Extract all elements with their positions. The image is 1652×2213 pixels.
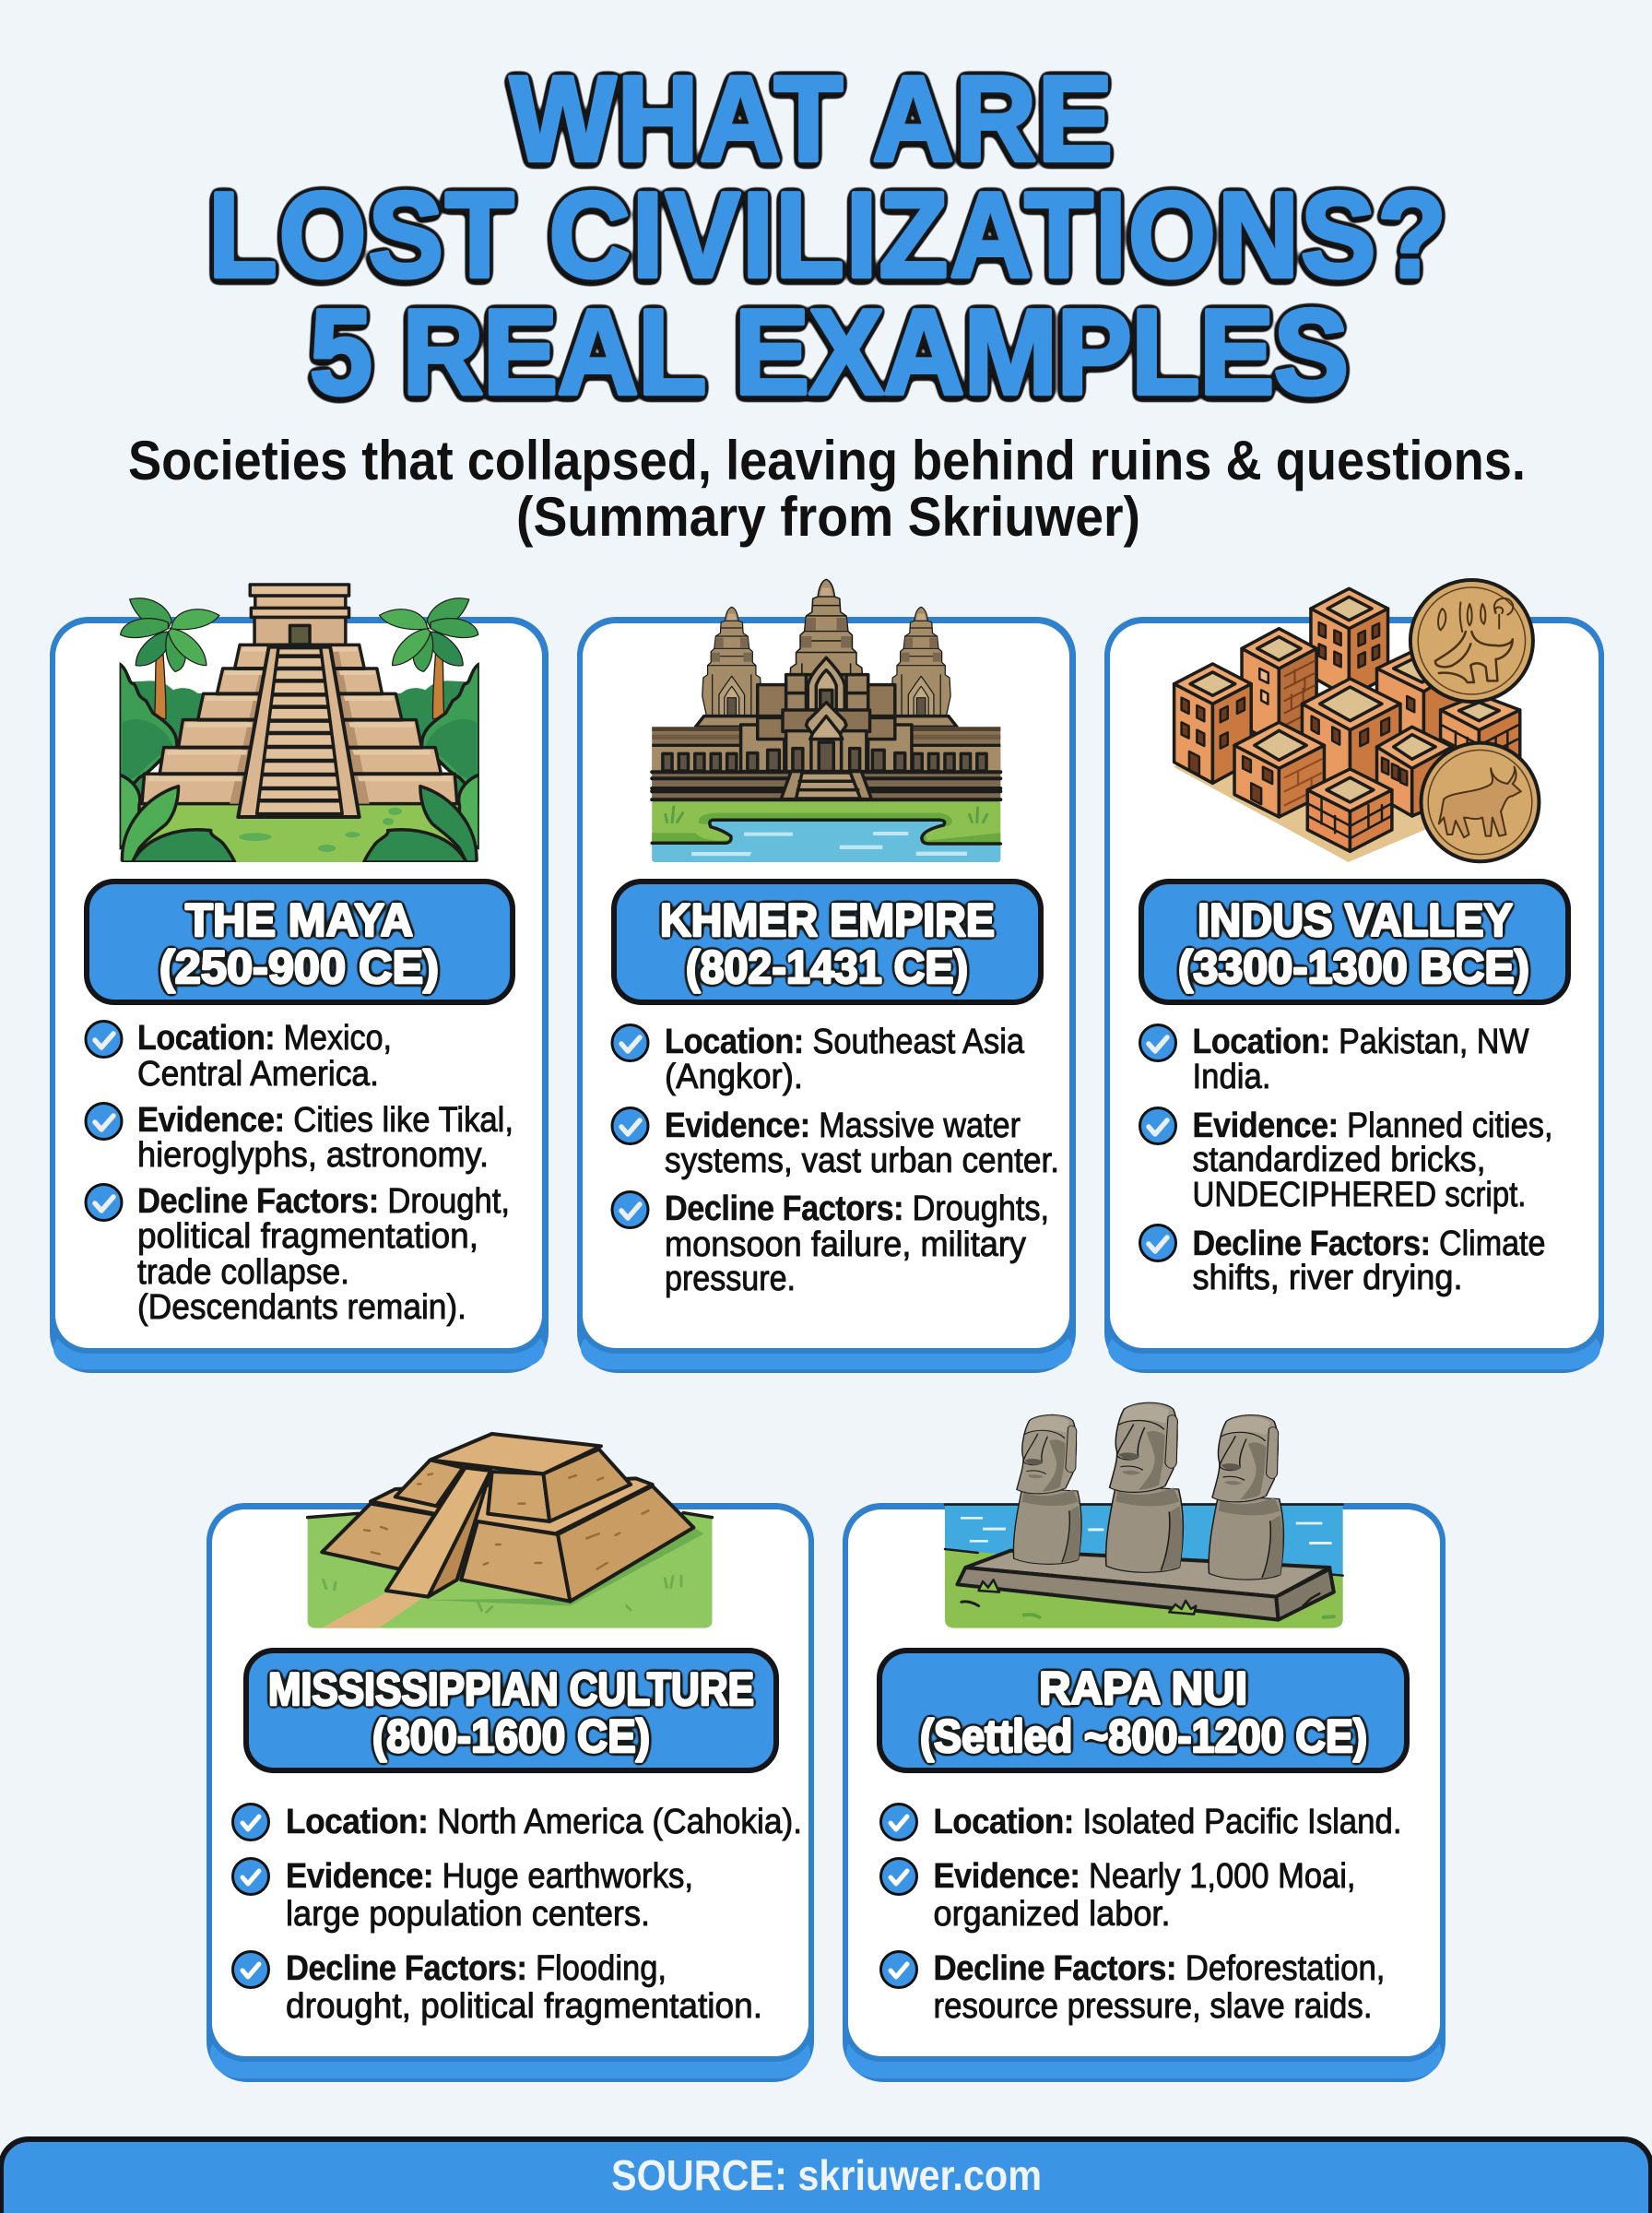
left building: [1174, 664, 1251, 783]
bullet: decline factors: [881, 1949, 1385, 2026]
illustration: earthwork mound: [308, 1434, 712, 1628]
seal with bull: [1422, 743, 1539, 861]
heading plate: Mississippian Culture: [246, 1651, 776, 1770]
heading plate: The Maya: [87, 882, 513, 1002]
heading plate: Indus Valley: [1141, 882, 1568, 1002]
title: 5 REAL EXAMPLES: [310, 284, 1349, 420]
card frame: [843, 1503, 1446, 2082]
panel: The Maya: [50, 585, 549, 1373]
illustration: Angkor temple with moat: [652, 579, 1000, 862]
panel: Rapa Nui: [843, 1402, 1446, 2082]
bullet: decline factors: [232, 1949, 762, 2026]
palm trees: [121, 598, 219, 719]
bullet: decline factors: [86, 1182, 510, 1327]
bullet: evidence: Evidence: Planned cities,: [1193, 1106, 1552, 1145]
footer source bar: SOURCE: skriuwer.com: [611, 2151, 1042, 2199]
far right brick building: [1441, 694, 1520, 777]
bullet: location: Location: Mexico,: [137, 1019, 392, 1058]
bullet: evidence: organized labor.: [933, 1895, 1171, 1934]
heading plate: Mississippian Culture: MISSISSIPPIAN CULTURE: [268, 1663, 754, 1715]
bullet: evidence: [612, 1106, 1059, 1180]
heading plate: The Maya: (250-900 CE): [159, 941, 439, 993]
upper tier: [395, 1434, 631, 1521]
bullet: decline factors: Decline Factors: Drought,: [137, 1182, 510, 1221]
second tall building: [1242, 629, 1316, 747]
bullet: decline factors: [1139, 1225, 1545, 1297]
front left building: [1234, 722, 1324, 817]
card frame: [50, 617, 549, 1373]
bullet: decline factors: Decline Factors: Flooding,: [286, 1949, 667, 1988]
central gate: [741, 657, 912, 772]
sea and island: [945, 1505, 1343, 1628]
bullet: location: Location: North America (Cahokia).: [286, 1803, 802, 1841]
ramp: [386, 1468, 490, 1597]
front brick cube: [1307, 769, 1392, 851]
bullet: decline factors: political fragmentation,: [137, 1217, 478, 1256]
heading plate: Rapa Nui: RAPA NUI: [1039, 1663, 1247, 1714]
bullet: evidence: Evidence: Cities like Tikal,: [137, 1101, 513, 1140]
subtitle: Societies that collapsed, leaving behind ruins & questions.: [128, 430, 1526, 491]
sand base: [1174, 735, 1433, 862]
bullet: evidence: [881, 1857, 1355, 1934]
panel: Mississippian Culture: [206, 1434, 814, 2082]
bullet: evidence: hieroglyphs, astronomy.: [137, 1136, 489, 1175]
bullet: evidence: Evidence: Massive water: [665, 1106, 1021, 1145]
heading plate: Khmer Empire: [614, 882, 1041, 1002]
bullet: evidence: Evidence: Huge earthworks,: [286, 1857, 693, 1896]
stone platform: [957, 1551, 1334, 1620]
bullet: decline factors: [612, 1189, 1049, 1298]
side towers: [702, 607, 761, 716]
card frame: [577, 617, 1076, 1373]
bullet: decline factors: drought, political fragmentation.: [286, 1987, 762, 2026]
card frame: [1104, 617, 1604, 1373]
bullet: decline factors: (Descendants remain).: [137, 1288, 466, 1327]
temple galleries: [652, 685, 1000, 800]
card frame: [206, 1503, 814, 2082]
bullet: evidence: standardized bricks,: [1193, 1141, 1486, 1179]
bullet: evidence: systems, vast urban center.: [665, 1142, 1059, 1180]
bullet: evidence: [232, 1857, 693, 1934]
heading plate: Mississippian Culture: (800-1600 CE): [372, 1710, 650, 1762]
right rear building: [1377, 650, 1459, 759]
back tall building: [1311, 588, 1388, 698]
title: WHAT ARE: [510, 51, 1113, 186]
central staircase: [238, 647, 360, 817]
bullet: evidence: [1139, 1106, 1552, 1214]
bullet: location: Location: Southeast Asia: [665, 1023, 1025, 1061]
heading plate: Rapa Nui: (Settled ~800-1200 CE): [920, 1710, 1367, 1762]
bullet: decline factors: shifts, river drying.: [1193, 1259, 1462, 1297]
grass and moat: [652, 800, 1000, 862]
right front building: [1377, 727, 1452, 816]
bullet: decline factors: Decline Factors: Climate: [1193, 1225, 1545, 1263]
heading plate: Khmer Empire: (802-1431 CE): [686, 941, 968, 993]
heading plate: Indus Valley: INDUS VALLEY: [1198, 894, 1513, 946]
moai right: [1209, 1415, 1283, 1580]
moai left: [1013, 1414, 1081, 1564]
bullet: decline factors: Decline Factors: Deforestation,: [933, 1949, 1385, 1988]
panel: Khmer Empire: [577, 579, 1076, 1373]
bullet: location: Central America.: [137, 1055, 379, 1094]
title: LOST CIVILIZATIONS?: [208, 167, 1446, 302]
temple: [250, 585, 349, 645]
soil marks: [364, 1473, 648, 1569]
footer source bar: [1, 2139, 1651, 2213]
subtitle: (Summary from Skriuwer): [516, 486, 1140, 548]
pyramid tiers: [142, 645, 457, 804]
bullet: location: [612, 1023, 1025, 1096]
bullet: location: Location: Isolated Pacific Island.: [933, 1803, 1401, 1841]
bullet: location: (Angkor).: [665, 1058, 803, 1096]
bullet: evidence: Evidence: Nearly 1,000 Moai,: [933, 1857, 1355, 1896]
foreground leaves: [120, 775, 479, 862]
bullet: evidence: UNDECIPHERED script.: [1193, 1176, 1527, 1214]
ground spots: [239, 808, 402, 852]
grass: [308, 1512, 712, 1628]
moai center: [1106, 1402, 1183, 1572]
bullet: location: India.: [1193, 1058, 1270, 1096]
central tower: [789, 579, 863, 716]
lower tier: [322, 1478, 693, 1602]
subtitle: [128, 430, 1526, 548]
heading plate: Rapa Nui: [879, 1651, 1407, 1770]
jungle bushes: [120, 664, 479, 799]
bullet: location: Location: Pakistan, NW: [1193, 1023, 1529, 1061]
center building: [1302, 679, 1400, 796]
heading plate: Khmer Empire: KHMER EMPIRE: [660, 894, 995, 946]
heading plate: Indus Valley: (3300-1300 BCE): [1178, 941, 1529, 993]
illustration: brick city and seals: [1174, 580, 1539, 862]
bullet: evidence: large population centers.: [286, 1895, 650, 1934]
bullet: decline factors: monsoon failure, military: [665, 1225, 1026, 1264]
heading plate: The Maya: THE MAYA: [185, 894, 413, 946]
seal with script and animal: [1410, 580, 1533, 702]
illustration: Moai statues: [945, 1402, 1343, 1628]
bullet: location: [86, 1019, 392, 1094]
front steps: [781, 772, 871, 799]
bullet: decline factors: Decline Factors: Droughts,: [665, 1189, 1049, 1228]
bullet: evidence: [86, 1101, 513, 1175]
bullet: decline factors: resource pressure, slave raids.: [933, 1987, 1372, 2026]
bullet: decline factors: pressure.: [665, 1260, 796, 1298]
panel: Indus Valley: [1104, 580, 1604, 1373]
title: [208, 51, 1446, 420]
bullet: decline factors: trade collapse.: [137, 1253, 349, 1292]
illustration: Maya pyramid with jungle: [120, 585, 479, 864]
bullet: location: [1139, 1023, 1529, 1096]
